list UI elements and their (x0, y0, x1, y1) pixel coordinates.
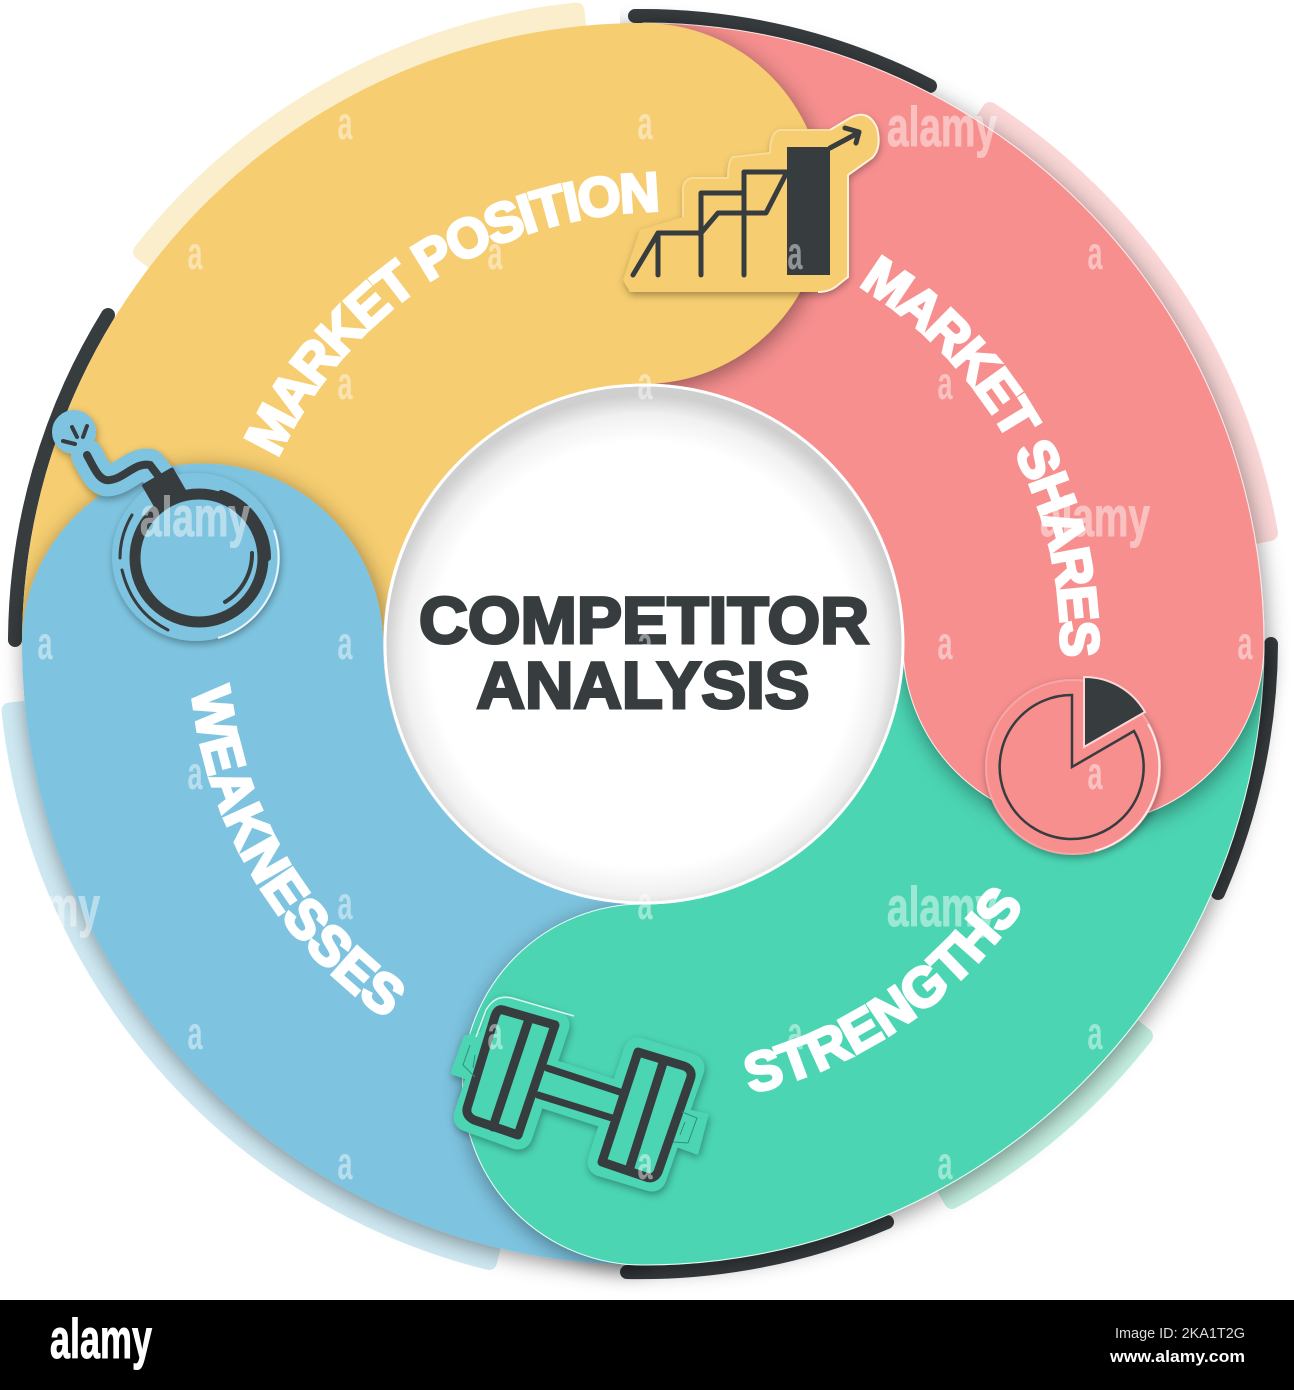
watermark pattern: alamy (1040, 485, 1150, 548)
panel: weaknesses (22, 464, 643, 1265)
watermark pattern: a (1088, 227, 1103, 279)
panel: market shares (643, 23, 1264, 825)
footer band (0, 1300, 1294, 1390)
watermark pattern: a (338, 97, 353, 149)
heading: weaknesses: WEAKNESSES (191, 682, 404, 1015)
panel: market position head (620, 14, 822, 392)
title: ANALYSIS (476, 648, 810, 722)
watermark pattern: a (938, 617, 953, 669)
watermark pattern: alamy (140, 485, 250, 548)
watermark pattern: a (38, 617, 53, 669)
footer band: www.alamy.com (1109, 1347, 1245, 1366)
watermark pattern: a (488, 227, 503, 279)
watermark pattern: a (938, 357, 953, 409)
watermark pattern: a (488, 1007, 503, 1059)
watermark pattern: a (188, 1007, 203, 1059)
watermark pattern: a (638, 97, 653, 149)
watermark pattern: a (788, 1007, 803, 1059)
watermark pattern: a (638, 617, 653, 669)
title: COMPETITOR (419, 583, 869, 657)
watermark pattern: alamy (887, 875, 997, 938)
watermark pattern: a (338, 1137, 353, 1189)
watermark pattern: a (188, 747, 203, 799)
footer band: Image ID: 2KA1T2G (1115, 1325, 1245, 1342)
title (419, 583, 869, 722)
watermark pattern: a (338, 877, 353, 929)
watermark pattern: a (638, 357, 653, 409)
watermark pattern: a (1238, 357, 1253, 409)
watermark pattern: a (788, 227, 803, 279)
watermark pattern: a (1088, 1007, 1103, 1059)
watermark pattern: a (638, 1137, 653, 1189)
icon: pie chart (986, 677, 1160, 854)
watermark pattern: a (638, 877, 653, 929)
icon: rising bar chart (623, 115, 879, 292)
panel: strengths (463, 644, 1264, 1265)
watermark pattern: alamy (887, 95, 997, 158)
heading: market position: MARKET POSITION (243, 171, 658, 458)
watermark pattern: a (338, 357, 353, 409)
watermark pattern: a (338, 617, 353, 669)
panel: market position base (22, 23, 823, 644)
footer band: alamy (50, 1307, 152, 1370)
centre circle (385, 385, 903, 903)
watermark pattern: a (1088, 747, 1103, 799)
heading: market shares: MARKET SHARES (860, 254, 1100, 656)
icon: dumbbell (452, 997, 707, 1178)
watermark pattern (0, 95, 1253, 1189)
heading: strengths: STRENGTHS (744, 888, 1020, 1092)
watermark pattern: a (938, 1137, 953, 1189)
icon: bomb (61, 419, 279, 638)
watermark pattern: a (1238, 617, 1253, 669)
watermark pattern: a (188, 227, 203, 279)
